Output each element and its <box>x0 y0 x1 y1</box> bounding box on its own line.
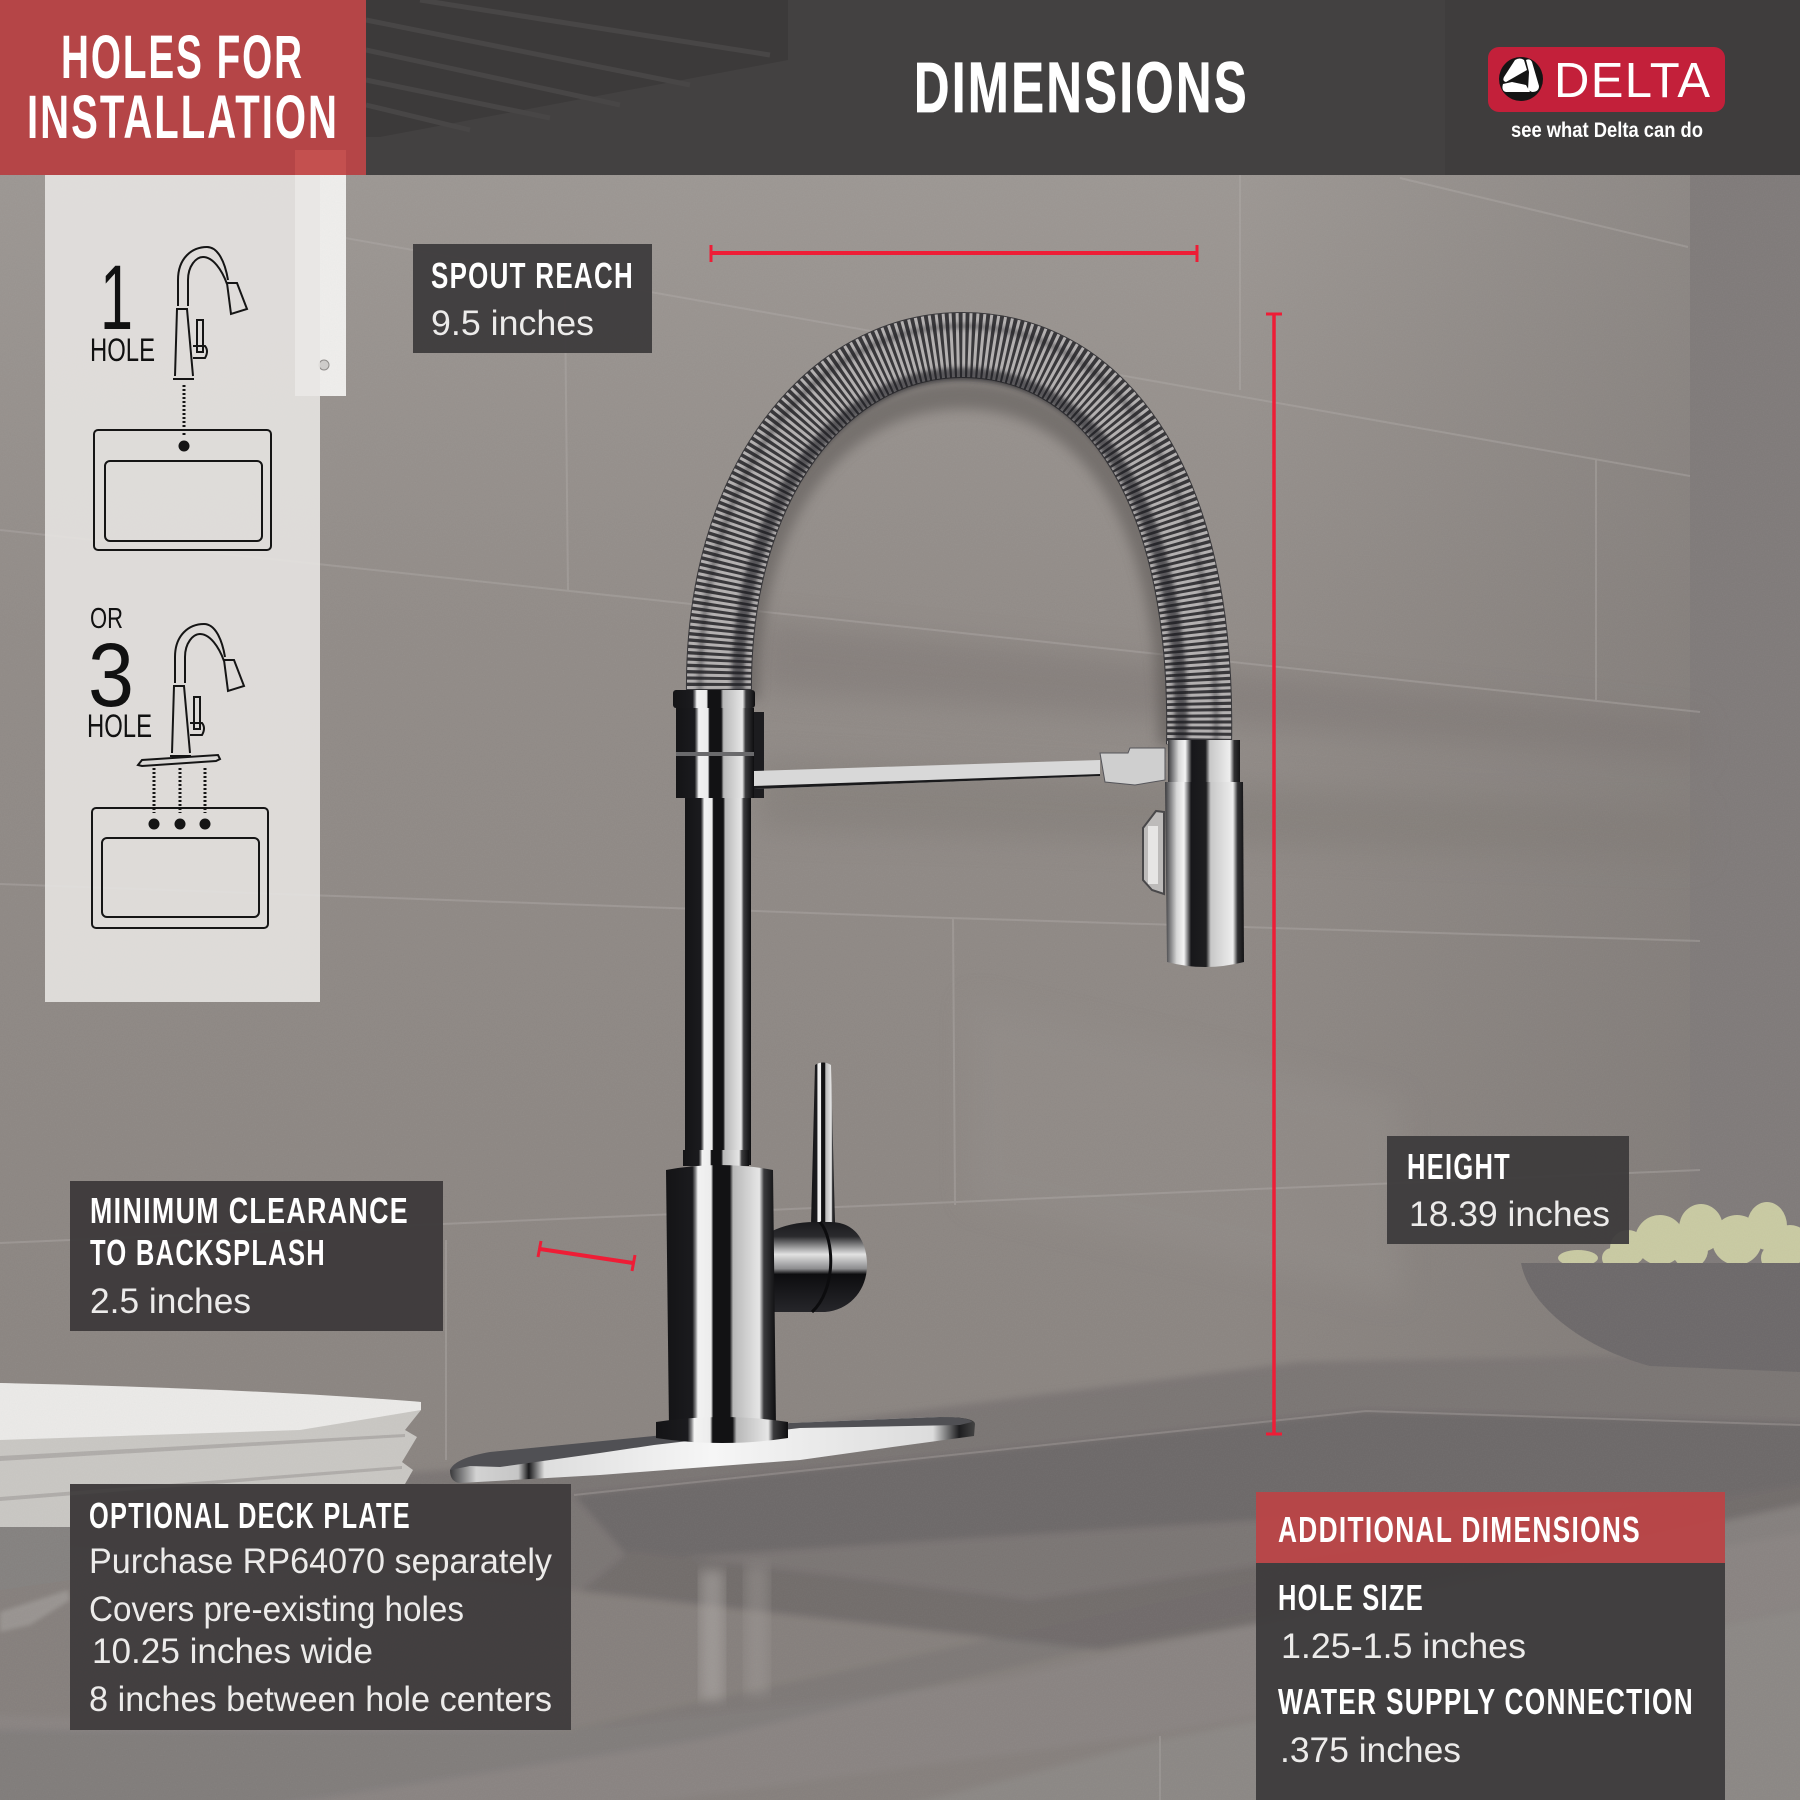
bowl of grapes <box>1521 1202 1800 1372</box>
icon: dotted line <box>182 385 186 436</box>
callout: optional deck plate: Purchase RP64070 separately <box>89 1542 552 1581</box>
callout: optional deck plate: Covers pre-existing holes <box>89 1590 464 1629</box>
3 hole label <box>87 603 152 744</box>
callout: spout reach <box>413 244 652 353</box>
Delta logo <box>1488 47 1725 142</box>
icon: dotted lines <box>154 768 205 813</box>
upper collar <box>673 690 764 798</box>
callout: spout reach: SPOUT REACH <box>431 255 634 296</box>
callout: optional deck plate <box>70 1484 571 1730</box>
sprayer head <box>1143 740 1244 967</box>
callout: minimum clearance: 2.5 inches <box>90 1282 251 1321</box>
faucet base <box>666 1150 776 1428</box>
icon: one hole sink <box>94 430 271 550</box>
logo red badge <box>1488 47 1725 112</box>
additional dimensions header <box>1256 1492 1725 1563</box>
additional dimensions body: .375 inches <box>1280 1731 1461 1770</box>
additional dimensions body: HOLE SIZE <box>1278 1577 1424 1618</box>
stacked white plates <box>0 1383 421 1590</box>
1 hole label: HOLE <box>90 332 155 368</box>
red heading block: HOLES FOR <box>61 23 304 91</box>
dimension line: height <box>1266 313 1282 1434</box>
flexible spring hose <box>700 326 1216 745</box>
light panel background <box>45 175 320 1002</box>
logo wordmark: DELTA <box>1554 54 1710 108</box>
deck plate <box>450 1417 975 1483</box>
dimension line: backsplash clearance <box>538 1241 635 1271</box>
callout: minimum clearance: MINIMUM CLEARANCE <box>90 1190 409 1231</box>
panel: additional dimensions <box>1256 1492 1725 1800</box>
tagline: see what Delta can do <box>1511 119 1703 142</box>
icon: three hole faucet with plate <box>138 624 244 766</box>
fork reflection <box>0 1590 70 1632</box>
heading: dimensions: DIMENSIONS <box>914 49 1249 128</box>
panel: holes for installation <box>0 0 366 1002</box>
callout: optional deck plate: 8 inches between hole centers <box>89 1680 552 1719</box>
callout: height: 18.39 inches <box>1409 1195 1610 1234</box>
3 hole label: 3 <box>88 626 134 726</box>
callout: optional deck plate: OPTIONAL DECK PLATE <box>89 1495 411 1536</box>
callout: spout reach: 9.5 inches <box>431 304 594 343</box>
counter surfaces <box>0 1352 1800 1800</box>
faucet <box>450 326 1244 1483</box>
header band <box>0 0 1800 175</box>
dimension line: spout reach <box>710 245 1198 262</box>
icon: three hole sink <box>92 808 268 928</box>
3 hole label: OR <box>90 603 123 635</box>
additional dimensions header: ADDITIONAL DIMENSIONS <box>1278 1509 1641 1550</box>
lever handle <box>770 1062 867 1312</box>
additional dimensions body <box>1256 1563 1725 1800</box>
additional dimensions body: 1.25-1.5 inches <box>1281 1627 1526 1666</box>
red heading block: INSTALLATION <box>27 83 339 151</box>
crossbar <box>754 748 1165 789</box>
hose shadow <box>745 395 1172 745</box>
3 hole label: HOLE <box>87 708 152 744</box>
callout: height: HEIGHT <box>1407 1146 1511 1187</box>
shelf shadow in header <box>366 0 1800 175</box>
column neck <box>685 790 751 1165</box>
icon: one hole faucet <box>173 247 247 379</box>
1 hole label <box>90 247 155 368</box>
callout: minimum clearance: TO BACKSPLASH <box>90 1232 326 1273</box>
white wall switch plate <box>295 150 346 396</box>
callout: height <box>1387 1136 1629 1244</box>
red heading block <box>0 0 366 175</box>
callout: optional deck plate: 10.25 inches wide <box>92 1632 373 1671</box>
logo emblem <box>1499 57 1543 101</box>
callout: minimum clearance <box>70 1181 443 1331</box>
1 hole label: 1 <box>100 247 133 349</box>
